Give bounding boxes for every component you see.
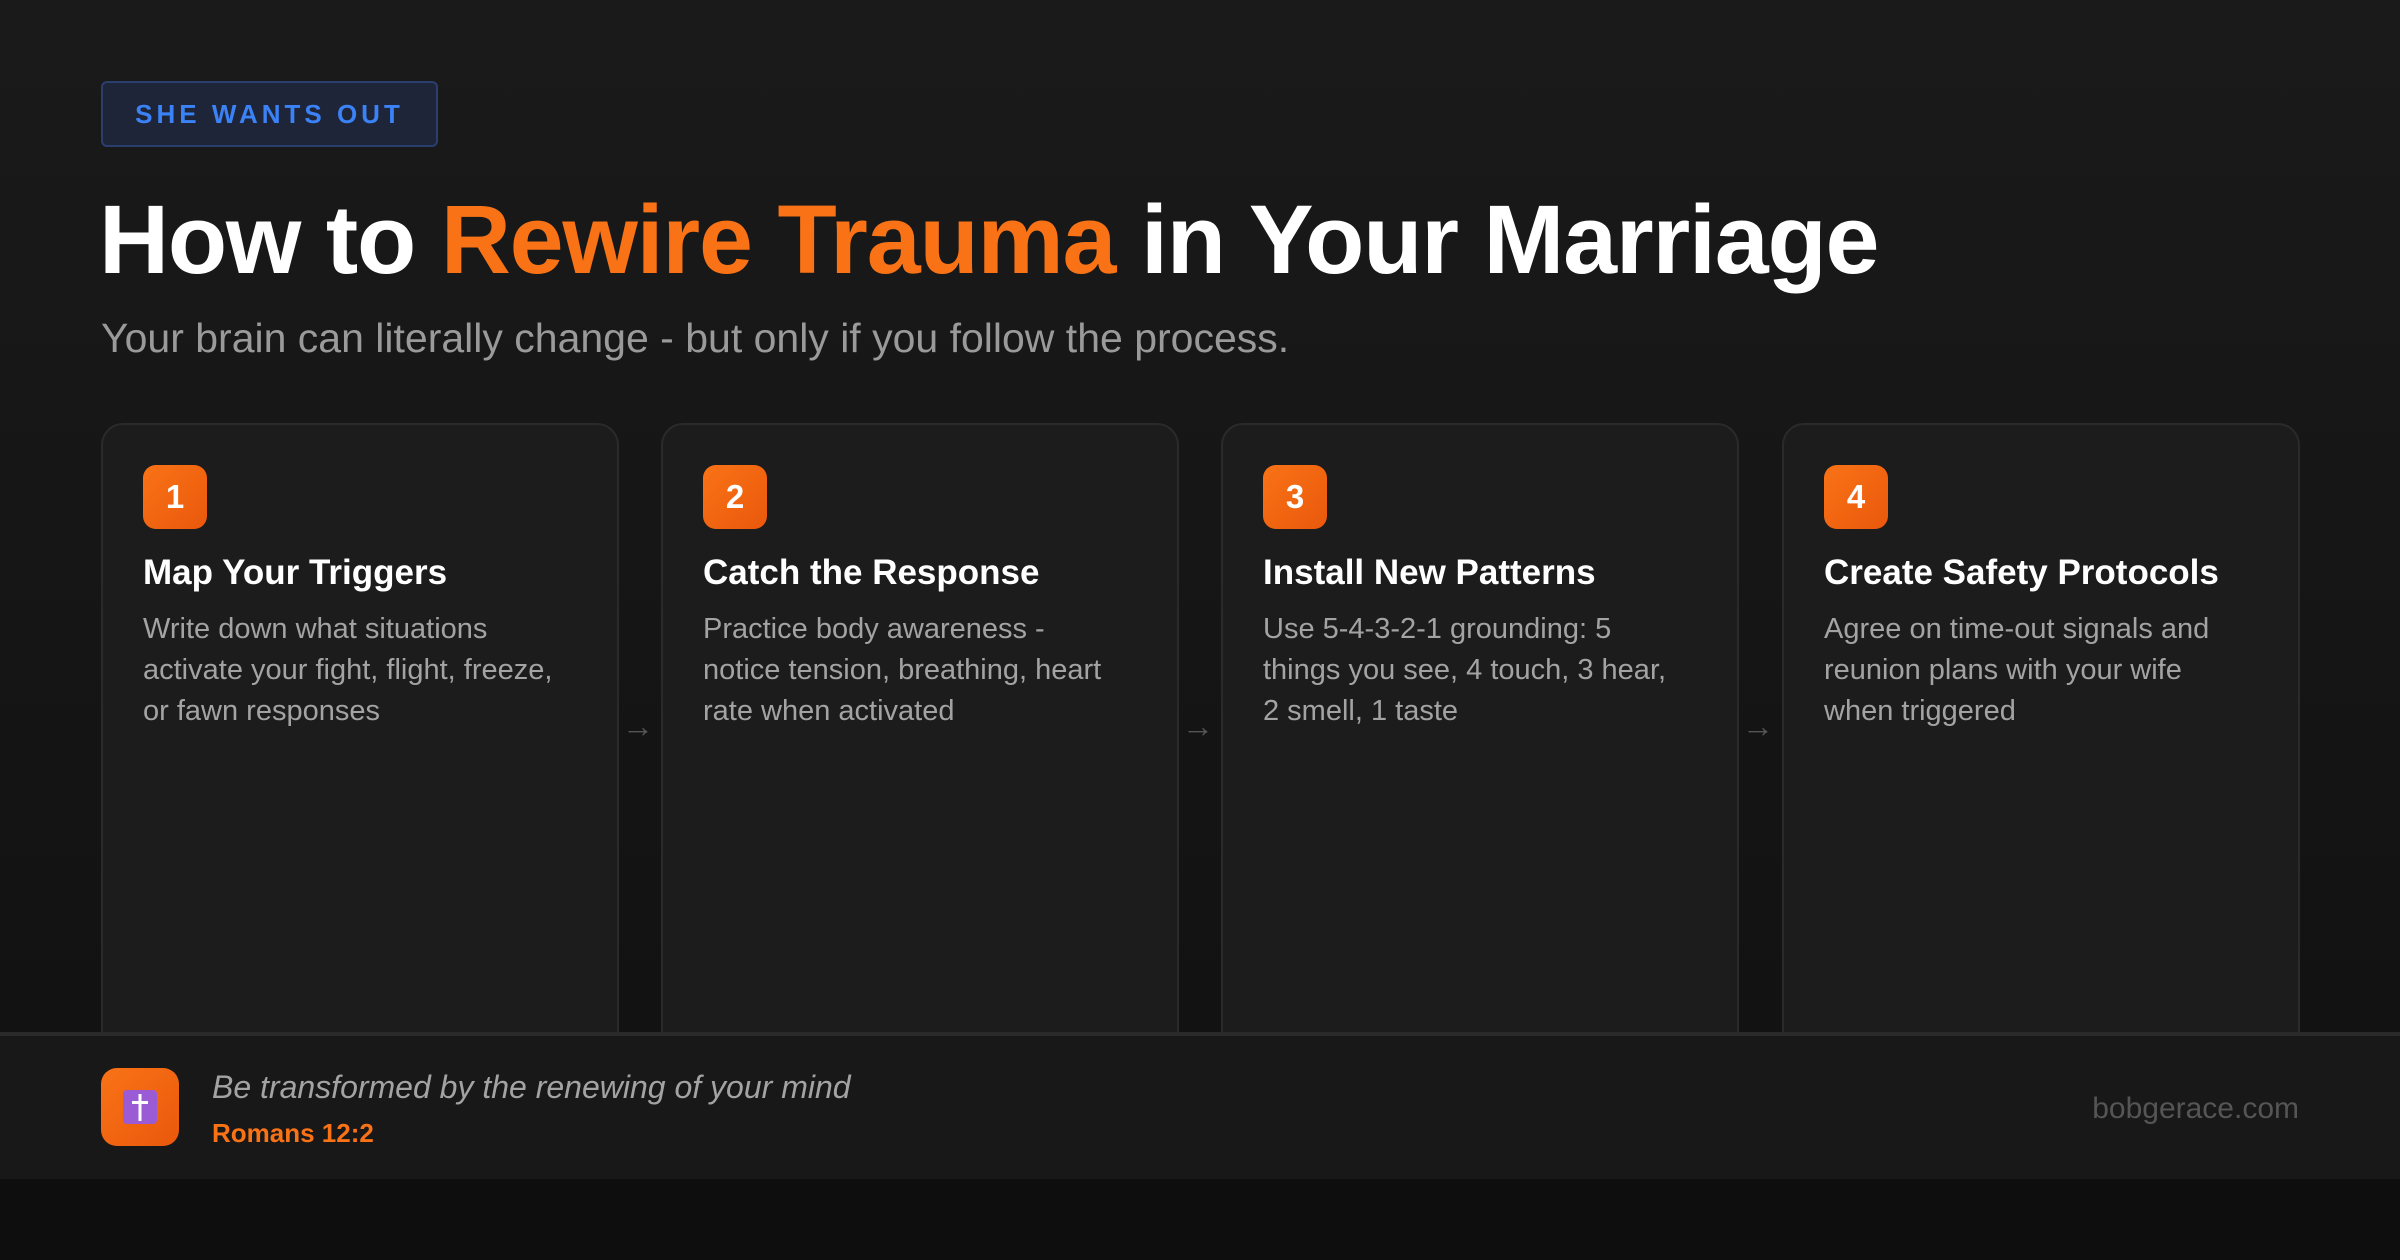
text 1: Write down what situations bbox=[143, 613, 487, 645]
panel: step 3 bbox=[1221, 423, 1739, 1035]
text 4: Agree on time-out signals and bbox=[1824, 613, 2209, 645]
panel: step 2 bbox=[661, 423, 1179, 1035]
title: How to Rewire Trauma in Your Marriage bbox=[99, 185, 1878, 294]
heading 1: Map Your Triggers bbox=[143, 553, 447, 592]
text 2: Practice body awareness - bbox=[703, 613, 1045, 645]
badge 3: 3 bbox=[1286, 478, 1304, 515]
badge 2: 2 bbox=[726, 478, 744, 515]
panel: step 4 bbox=[1782, 423, 2300, 1035]
text 3: Use 5-4-3-2-1 grounding: 5 bbox=[1263, 613, 1611, 645]
heading 3: Install New Patterns bbox=[1263, 553, 1596, 592]
badge 3 bbox=[1263, 465, 1327, 529]
reference: Romans 12:2 bbox=[212, 1118, 374, 1148]
text 1: or fawn responses bbox=[143, 695, 380, 727]
badge 4 bbox=[1824, 465, 1888, 529]
text 4: when triggered bbox=[1824, 695, 2016, 727]
text 2: rate when activated bbox=[703, 695, 954, 727]
badge 4: 4 bbox=[1847, 478, 1865, 515]
badge 1: 1 bbox=[166, 478, 184, 515]
heading 4: Create Safety Protocols bbox=[1824, 553, 2219, 592]
text 1: activate your fight, flight, freeze, bbox=[143, 654, 552, 686]
arrow 2: → bbox=[1182, 708, 1214, 744]
subtitle: Your brain can literally change - but only if you follow the process. bbox=[101, 315, 1289, 361]
text 4 bbox=[1824, 613, 2209, 727]
text 1 bbox=[143, 613, 552, 727]
heading 2: Catch the Response bbox=[703, 553, 1039, 592]
text 2 bbox=[703, 613, 1101, 727]
arrow 3: → bbox=[1742, 708, 1774, 744]
tag: she wants out bbox=[101, 81, 438, 147]
arrow 1: → bbox=[622, 708, 654, 744]
panel: step 1 bbox=[101, 423, 619, 1035]
text 3: things you see, 4 touch, 3 hear, bbox=[1263, 654, 1666, 686]
text 2: notice tension, breathing, heart bbox=[703, 654, 1101, 686]
tag: she wants out: SHE WANTS OUT bbox=[135, 99, 404, 129]
site: bobgerace.com bbox=[2092, 1092, 2299, 1125]
footer bbox=[0, 1032, 2400, 1179]
badge 1 bbox=[143, 465, 207, 529]
quote: Be transformed by the renewing of your mind bbox=[212, 1069, 851, 1105]
text 3 bbox=[1263, 613, 1666, 727]
text 3: 2 smell, 1 taste bbox=[1263, 695, 1458, 727]
text 4: reunion plans with your wife bbox=[1824, 654, 2182, 686]
icon: cross bbox=[101, 1068, 179, 1146]
badge 2 bbox=[703, 465, 767, 529]
